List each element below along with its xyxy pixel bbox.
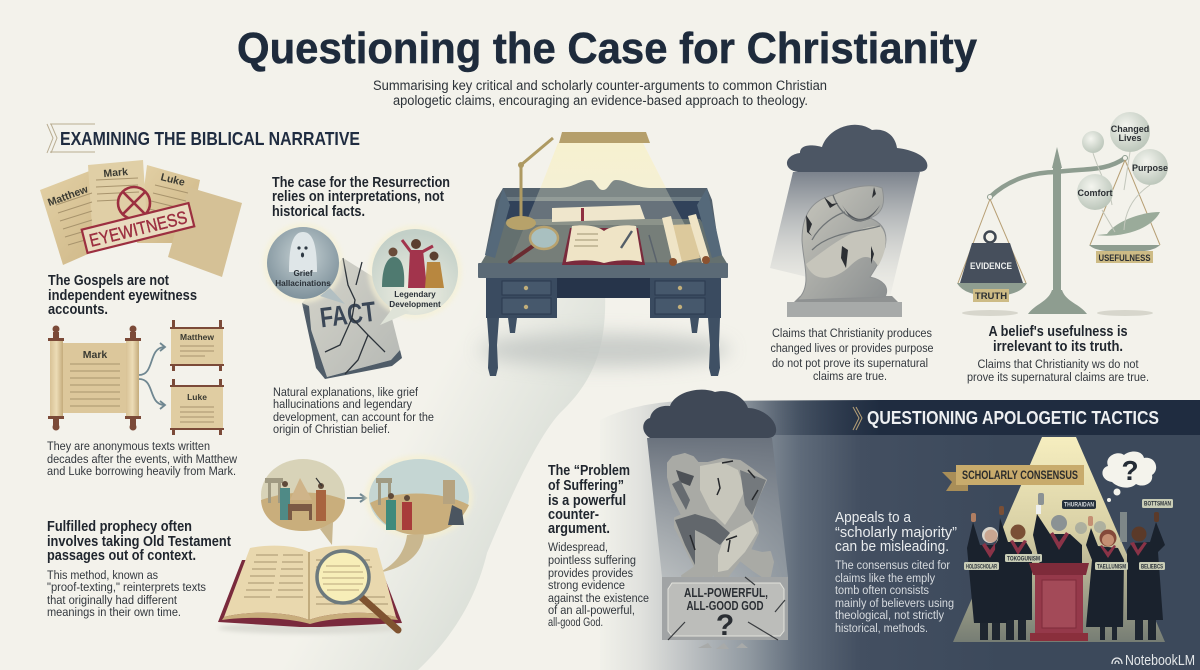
scroll on desk (552, 205, 645, 222)
illustration: mark scroll and copies: Matthew (180, 332, 214, 342)
text: natural explanations (273, 385, 434, 436)
illustration: kneeling statue on plinth: ? (716, 609, 734, 642)
subtitle (373, 78, 827, 108)
subtitle: apologetic claims, encouraging an evidence-based approach to theology. (393, 93, 808, 108)
heading: problem of suffering: argument. (548, 521, 610, 537)
scholar name tags: BOTTSMAN (1144, 502, 1171, 508)
heading: fulfilled prophecy: Fulfilled prophecy often (47, 519, 192, 535)
illustration: mark scroll and copies: Luke (187, 392, 207, 402)
illustration: balance scale of evidence and usefulness: Lives (1118, 133, 1142, 143)
thought bubble with question mark (1102, 452, 1156, 502)
illustration: desk with books and scrolls (478, 132, 730, 376)
scholar name tags (964, 499, 1173, 570)
scholar figure 1 (967, 513, 1008, 623)
scholar figure 2 (995, 506, 1032, 620)
scholar name tags: BELIEBCS (1141, 564, 1163, 570)
text: widespread suffering: of an all-powerful, (548, 603, 635, 617)
icon: storm cloud (787, 125, 927, 172)
heading: scholarly majority (835, 509, 957, 555)
heading: problem of suffering: The “Problem (548, 463, 630, 479)
section heading: questioning apologetic tactics: QUESTIONING APOLOGETIC TACTICS (867, 407, 1159, 428)
heading: gospels: independent eyewitness (48, 288, 197, 304)
heading: gospels: accounts. (48, 302, 108, 318)
arrow: mark to luke (139, 379, 165, 409)
heading: problem of suffering: counter- (548, 507, 599, 523)
subtitle: Summarising key critical and scholarly counter-arguments to common Christian (373, 78, 827, 93)
text: proof-texting: This method, known as (47, 568, 158, 582)
section heading: examining the biblical narrative: EXAMINING THE BIBLICAL NARRATIVE (60, 129, 360, 149)
icon: storm cloud lower (643, 390, 776, 438)
text: consensus explanation: mainly of believers using (835, 596, 954, 610)
illustration: kneeling statue on plinth: ALL-POWERFUL, (684, 585, 768, 600)
text: usefulness claim: Claims that Christianity ws do not (978, 357, 1139, 371)
text: widespread suffering: pointless suffering (548, 553, 636, 567)
text: anonymous texts: and Luke borrowing heavily from Mark. (47, 464, 236, 478)
scholar figure 3 (1033, 493, 1082, 565)
text: anonymous texts (47, 439, 237, 478)
icon: lamp (506, 132, 650, 230)
illustration: prophecy context scene bubbles (261, 455, 473, 573)
heading: gospels: The Gospels are not (48, 273, 169, 289)
text: consensus explanation: historical, methods. (835, 621, 928, 635)
banner: scholarly consensus (942, 465, 1084, 491)
text: proof-texting (47, 568, 206, 619)
illustration: balance scale of evidence and usefulness: Changed (1111, 124, 1149, 134)
illustration: balance scale of evidence and usefulness: EVIDENCE (970, 261, 1012, 272)
text: changed lives claim (770, 326, 934, 383)
scholar name tags: TOKOGUNISM (1007, 556, 1040, 562)
illustration: gospel parchments with eyewitness stamp: EYEWITNESS (87, 207, 189, 251)
illustration: kneeling statue on plinth (643, 390, 788, 649)
path band from desk to lower left (250, 290, 605, 670)
illustration: gospel parchments with eyewitness stamp (40, 160, 242, 277)
text: natural explanations: development, can account for the (273, 410, 434, 424)
illustration: legendary development bubble: Legendary (394, 290, 436, 299)
text: widespread suffering: against the existence (548, 591, 649, 605)
text: consensus explanation: tomb often consists (835, 583, 929, 597)
heading: scholarly majority: “scholarly majority” (835, 524, 957, 541)
text: anonymous texts: decades after the events, with Matthew (47, 452, 237, 466)
text: consensus explanation: The consensus cited for (835, 558, 950, 572)
text: changed lives claim: do not pot prove its supernatural (772, 356, 928, 370)
text: changed lives claim: Claims that Christianity produces (772, 326, 932, 340)
icon: feather (1097, 212, 1160, 236)
illustration: open book with magnifying glass (218, 546, 402, 634)
banner: scholarly consensus: SCHOLARLY CONSENSUS (962, 468, 1078, 482)
text: consensus explanation (835, 558, 954, 635)
text: usefulness claim: prove its supernatural claims are true. (967, 370, 1149, 384)
text: widespread suffering: strong evidence (548, 578, 625, 592)
text: consensus explanation: claims like the emply (835, 571, 936, 585)
illustration: mark scroll and copies (48, 320, 224, 435)
panel: questioning apologetic tactics (600, 400, 1200, 670)
text: proof-texting: that originally had different (47, 593, 177, 607)
illustration: scholars at podium under spotlight (942, 437, 1173, 642)
text: natural explanations: origin of Christian belief. (273, 422, 390, 436)
heading: resurrection: The case for the Resurrection (272, 175, 450, 191)
illustration: balance scale of evidence and usefulness (957, 112, 1168, 316)
heading: usefulness: A belief's usefulness is (988, 324, 1128, 340)
illustration: balance scale of evidence and usefulness: USEFULNESS (1098, 253, 1150, 263)
illustration: mark scroll and copies: Mark (83, 349, 107, 361)
heading: gospels (48, 273, 197, 318)
illustration: grief hallucinations bubble: Grief (293, 269, 313, 278)
illustration: statue under cloud, top (770, 125, 927, 317)
text: changed lives claim: claims are true. (813, 369, 887, 383)
illustration: balance scale of evidence and usefulness: Purpose (1132, 163, 1168, 173)
arrow: context shift (347, 494, 366, 502)
text: natural explanations: hallucinations and legendary (273, 397, 413, 411)
illustration: cracked fact stone: FACT (318, 296, 378, 333)
section heading: examining the biblical narrative (47, 124, 360, 153)
open book on desk (562, 225, 645, 265)
illustration: grief hallucinations bubble: Hallacinations (275, 279, 331, 288)
text: consensus explanation: theological, not strictly (835, 608, 945, 622)
scholar figure 4 (1086, 516, 1124, 627)
text: usefulness claim (967, 357, 1149, 384)
illustration: kneeling statue on plinth: ALL-GOOD GOD (686, 598, 764, 613)
text: proof-texting: "proof-texting," reinterprets texts (47, 580, 206, 594)
illustration: cracked fact stone (302, 258, 402, 379)
heading: problem of suffering: of Suffering” (548, 478, 624, 494)
illustration: gospel parchments with eyewitness stamp: Mark (103, 166, 129, 180)
heading: scholarly majority: can be misleading. (835, 538, 949, 555)
heading: usefulness (988, 324, 1128, 355)
heading: usefulness: irrelevant to its truth. (993, 339, 1123, 355)
text: widespread suffering (548, 540, 649, 629)
heading: fulfilled prophecy (47, 519, 231, 564)
heading: resurrection: historical facts. (272, 204, 365, 220)
text: changed lives claim: changed lives or provides purpose (770, 341, 934, 355)
text: proof-texting: meanings in their own time. (47, 605, 181, 619)
heading: scholarly majority: Appeals to a (835, 509, 912, 526)
illustration: gospel parchments with eyewitness stamp: Matthew (46, 183, 91, 209)
scholar figure 5 (1127, 512, 1165, 620)
podium (1029, 563, 1089, 641)
heading: resurrection: relies on interpretations, not (272, 189, 444, 205)
heading: resurrection (272, 175, 450, 220)
text: widespread suffering: Widespread, (548, 540, 608, 554)
title: Questioning the Case for Christianity (237, 24, 978, 73)
heading: fulfilled prophecy: involves taking Old Testament (47, 534, 231, 550)
illustration: gospel parchments with eyewitness stamp: Luke (159, 171, 186, 189)
heading: problem of suffering (548, 463, 630, 537)
scholar name tags: TAELLUNISM (1097, 564, 1126, 570)
icon: desk magnifier (510, 227, 558, 262)
text: anonymous texts: They are anonymous texts written (47, 439, 210, 453)
heading: fulfilled prophecy: passages out of context. (47, 548, 196, 564)
scholar name tags: HOLDSCHOLAR (966, 564, 997, 570)
text: natural explanations: Natural explanations, like grief (273, 385, 418, 399)
text: widespread suffering: all-good God. (548, 615, 603, 629)
illustration: balance scale of evidence and usefulness: TRUTH (975, 291, 1007, 302)
scholar name tags: THURAIDAN (1064, 502, 1094, 508)
heading: problem of suffering: is a powerful (548, 493, 626, 509)
illustration: legendary development bubble (368, 225, 462, 325)
icon: magnifying glass (317, 551, 398, 630)
open scroll on desk (662, 214, 710, 266)
illustration: balance scale of evidence and usefulness: Comfort (1078, 188, 1112, 198)
arrow: mark to matthew (139, 343, 165, 375)
illustration: legendary development bubble: Development (389, 300, 441, 309)
thought bubble with question mark: ? (1121, 455, 1139, 486)
text: widespread suffering: provides provides (548, 566, 633, 580)
illustration: grief hallucinations bubble (263, 223, 345, 304)
